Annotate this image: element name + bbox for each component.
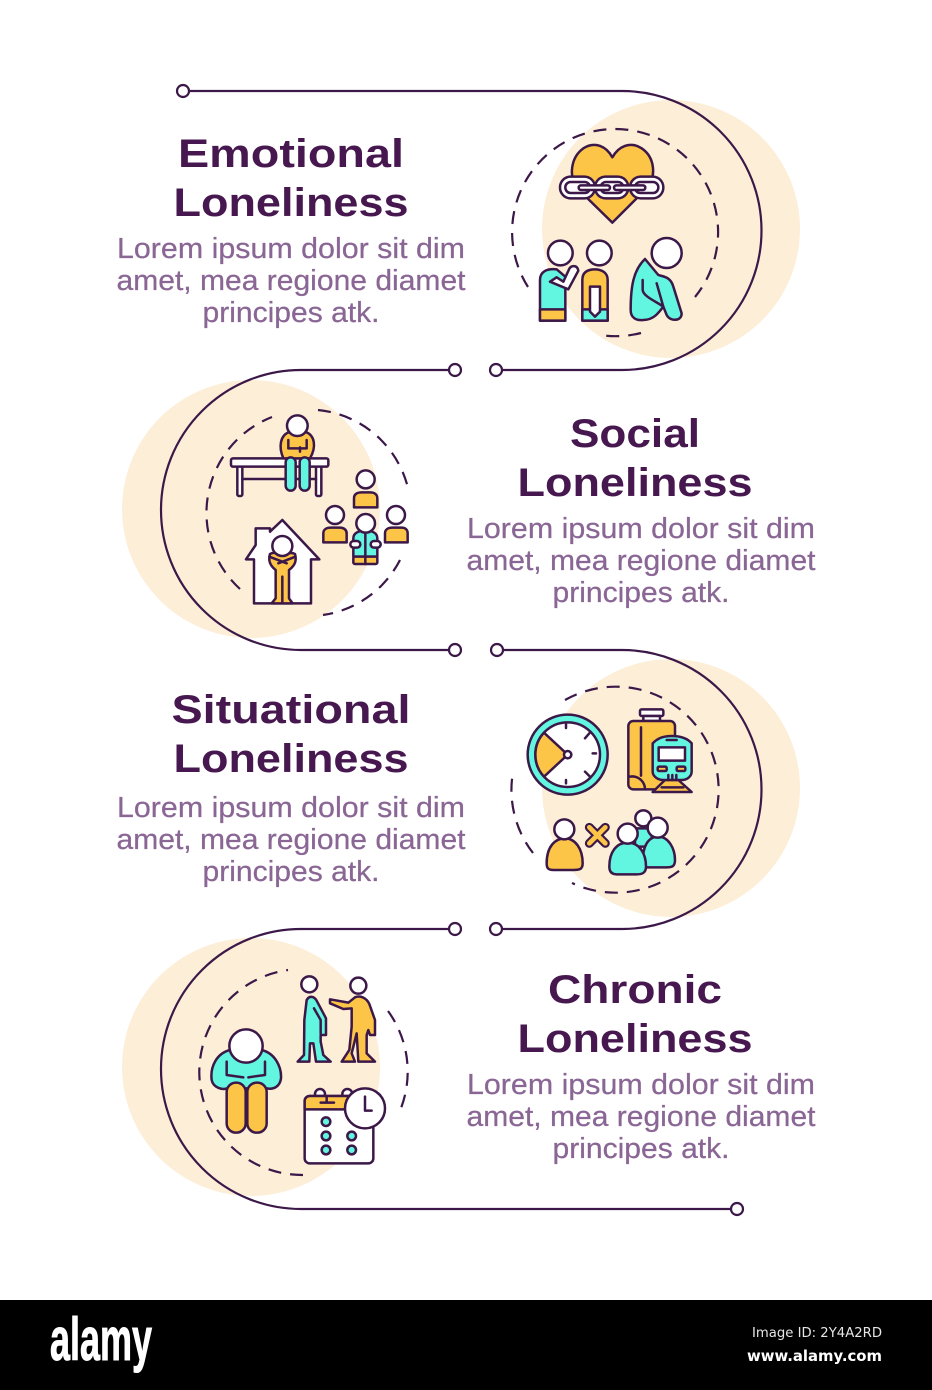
end node — [490, 364, 502, 376]
start node — [177, 85, 189, 97]
icon: sad person, arguing pair and calendar — [211, 976, 385, 1163]
peach circle — [542, 100, 800, 358]
body text: amet, mea regione diamet — [116, 265, 466, 297]
body text: amet, mea regione diamet — [466, 545, 816, 577]
dashed ring — [199, 970, 408, 1175]
heading: Loneliness — [518, 461, 752, 505]
connector line — [502, 650, 762, 929]
heading: Social — [570, 412, 700, 456]
heading: Emotional — [178, 132, 404, 176]
panel: social loneliness — [122, 364, 816, 656]
connector line — [161, 370, 449, 650]
end node — [490, 923, 502, 935]
body text: Lorem ipsum dolor sit dim — [117, 792, 465, 824]
dashed ring — [206, 410, 408, 615]
heading: Loneliness — [174, 737, 408, 781]
panel: chronic loneliness — [122, 923, 816, 1215]
start node — [491, 644, 503, 656]
body text: Lorem ipsum dolor sit dim — [467, 513, 815, 545]
heading: Loneliness — [174, 181, 408, 225]
peach circle — [542, 659, 800, 917]
body text: principes atk. — [202, 297, 380, 329]
footer bar — [0, 1300, 932, 1390]
image id: Image ID: 2Y4A2RD — [752, 1325, 882, 1341]
end node — [731, 1203, 743, 1215]
heading: Loneliness — [518, 1017, 752, 1061]
body text: principes atk. — [552, 1133, 730, 1165]
body text: Lorem ipsum dolor sit dim — [117, 233, 465, 265]
panel: situational loneliness — [116, 644, 800, 935]
body text: principes atk. — [202, 856, 380, 888]
website: www.alamy.com — [747, 1347, 882, 1365]
icon: chained heart and people — [540, 145, 682, 321]
body text: principes atk. — [552, 577, 730, 609]
peach circle — [122, 938, 380, 1196]
end node — [449, 644, 461, 656]
peach circle — [122, 380, 380, 638]
heading: Situational — [172, 688, 410, 732]
body text: amet, mea regione diamet — [466, 1101, 816, 1133]
connector line — [161, 929, 731, 1209]
icon: person on bench, group and house — [231, 415, 408, 603]
dashed ring — [512, 129, 718, 336]
body text: Lorem ipsum dolor sit dim — [467, 1069, 815, 1101]
connector line — [189, 91, 762, 370]
start node — [449, 923, 461, 935]
dashed ring — [511, 687, 719, 893]
heading: Chronic — [548, 968, 722, 1012]
icon: clock, luggage, train and people — [528, 709, 692, 874]
body text: amet, mea regione diamet — [116, 824, 466, 856]
panel: emotional loneliness — [116, 85, 800, 376]
logo wordmark: alamy — [50, 1306, 152, 1373]
start node — [449, 364, 461, 376]
